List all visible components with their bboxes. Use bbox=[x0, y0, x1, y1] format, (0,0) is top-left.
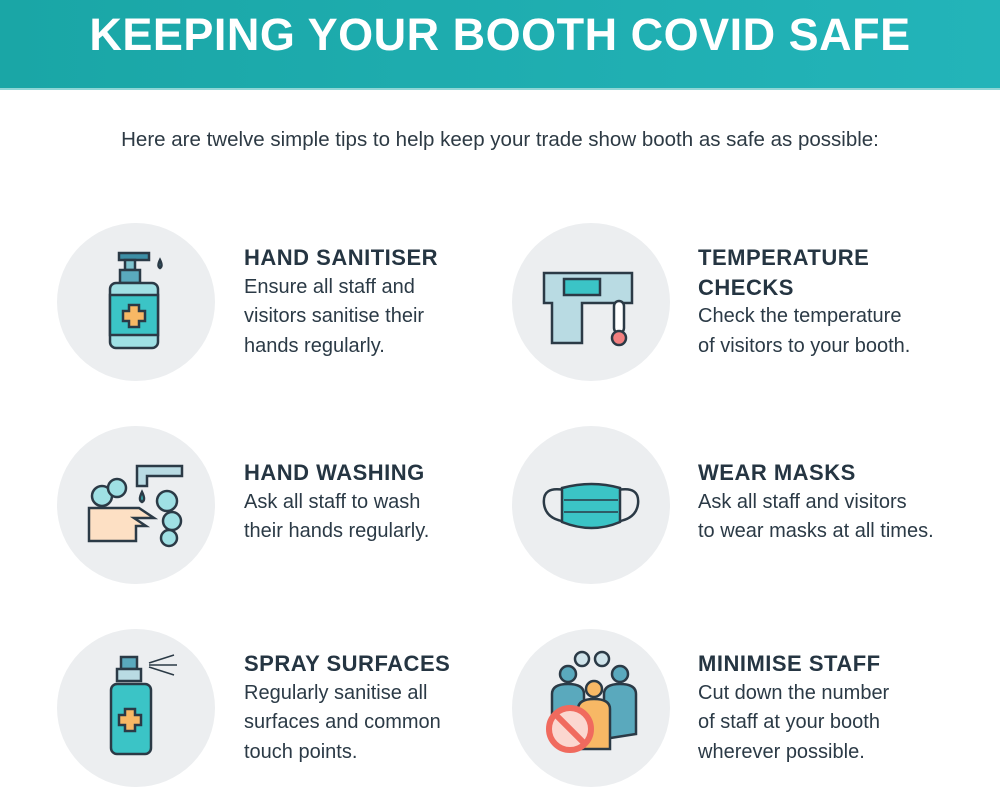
text: spray surfaces: surfaces and common bbox=[244, 711, 441, 733]
text: hand sanitiser: visitors sanitise their bbox=[244, 305, 424, 327]
text: wear masks bbox=[698, 460, 934, 542]
text: wear masks: Ask all staff and visitors bbox=[698, 490, 907, 512]
icon: hand sanitiser bbox=[57, 223, 215, 381]
text: temperature checks: CHECKS bbox=[698, 274, 794, 300]
text: minimise staff: of staff at your booth bbox=[698, 711, 880, 733]
text: spray surfaces: Regularly sanitise all bbox=[244, 682, 427, 704]
text: minimise staff: MINIMISE STAFF bbox=[698, 651, 881, 676]
icon: thermometer bbox=[512, 223, 670, 381]
text: temperature checks: TEMPERATURE bbox=[698, 245, 869, 270]
text: wear masks: WEAR MASKS bbox=[698, 460, 856, 485]
text: temperature checks: Check the temperature bbox=[698, 305, 901, 327]
text: spray surfaces: SPRAY SURFACES bbox=[244, 651, 450, 676]
icon: mask bbox=[512, 426, 670, 584]
text: minimise staff bbox=[698, 651, 889, 762]
title: KEEPING YOUR BOOTH COVID SAFE bbox=[89, 9, 911, 60]
subtitle: Here are twelve simple tips to help keep your trade show booth as safe as possible: bbox=[121, 128, 879, 151]
text: hand sanitiser: HAND SANITISER bbox=[244, 245, 438, 270]
text: temperature checks: of visitors to your booth. bbox=[698, 334, 910, 356]
text: wear masks: to wear masks at all times. bbox=[698, 520, 934, 542]
header banner bbox=[0, 0, 1000, 90]
text: spray surfaces bbox=[244, 651, 450, 762]
icon: spray bbox=[57, 629, 215, 787]
text: spray surfaces: touch points. bbox=[244, 740, 357, 762]
text: hand washing: HAND WASHING bbox=[244, 460, 425, 485]
text: hand sanitiser bbox=[244, 245, 438, 356]
text: hand sanitiser: hands regularly. bbox=[244, 334, 385, 356]
text: minimise staff: wherever possible. bbox=[698, 740, 865, 762]
text: hand washing bbox=[244, 460, 429, 542]
icon: minimise staff bbox=[512, 629, 670, 787]
text: hand sanitiser: Ensure all staff and bbox=[244, 276, 415, 298]
text: hand washing: Ask all staff to wash bbox=[244, 490, 420, 512]
text: minimise staff: Cut down the number bbox=[698, 682, 889, 704]
icon: hand washing bbox=[57, 426, 215, 584]
text: hand washing: their hands regularly. bbox=[244, 520, 429, 542]
text: temperature checks bbox=[698, 245, 910, 356]
